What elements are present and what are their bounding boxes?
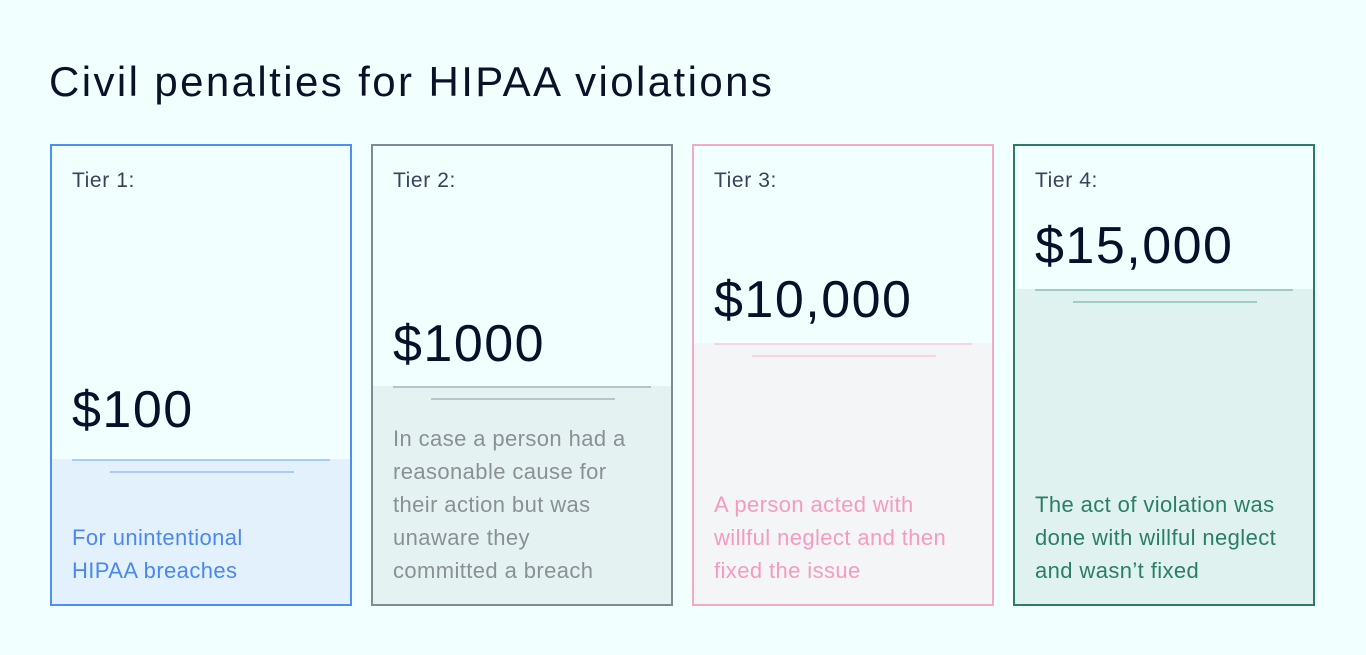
panel: tier 4: $15,000	[1035, 217, 1233, 275]
panel: tier 2: committed a breach	[393, 558, 593, 583]
panel: tier 4: Tier 4:	[1035, 169, 1098, 192]
panel: tier 1: For unintentional	[72, 525, 243, 550]
title: Civil penalties for HIPAA violations	[49, 58, 774, 105]
panel: tier 4	[1013, 144, 1315, 606]
panel: tier 2: their action but was	[393, 492, 591, 517]
panel: tier 2: Tier 2:	[393, 169, 456, 192]
panel: tier 2: unaware they	[393, 525, 530, 550]
panel: tier 2	[371, 144, 673, 606]
panel: tier 1: Tier 1:	[72, 169, 135, 192]
panel: tier 1	[50, 144, 352, 606]
panel: tier 3: A person acted with	[714, 492, 914, 517]
panel: tier 3: $10,000	[714, 271, 912, 329]
panel: tier 3	[692, 144, 994, 606]
panel: tier 2: reasonable cause for	[393, 459, 606, 484]
panel: tier 4: done with willful neglect	[1035, 525, 1276, 550]
panel: tier 4: and wasn’t fixed	[1035, 558, 1199, 583]
panel: tier 3: Tier 3:	[714, 169, 777, 192]
panel: tier 3: fixed the issue	[714, 558, 861, 583]
panel: tier 4: The act of violation was	[1035, 492, 1274, 517]
panel: tier 2: $1000	[393, 315, 545, 373]
panel: tier 2: In case a person had a	[393, 426, 626, 451]
panel: tier 1: HIPAA breaches	[72, 558, 237, 583]
panel: tier 1: $100	[72, 381, 194, 439]
panel: tier 3: willful neglect and then	[714, 525, 946, 550]
